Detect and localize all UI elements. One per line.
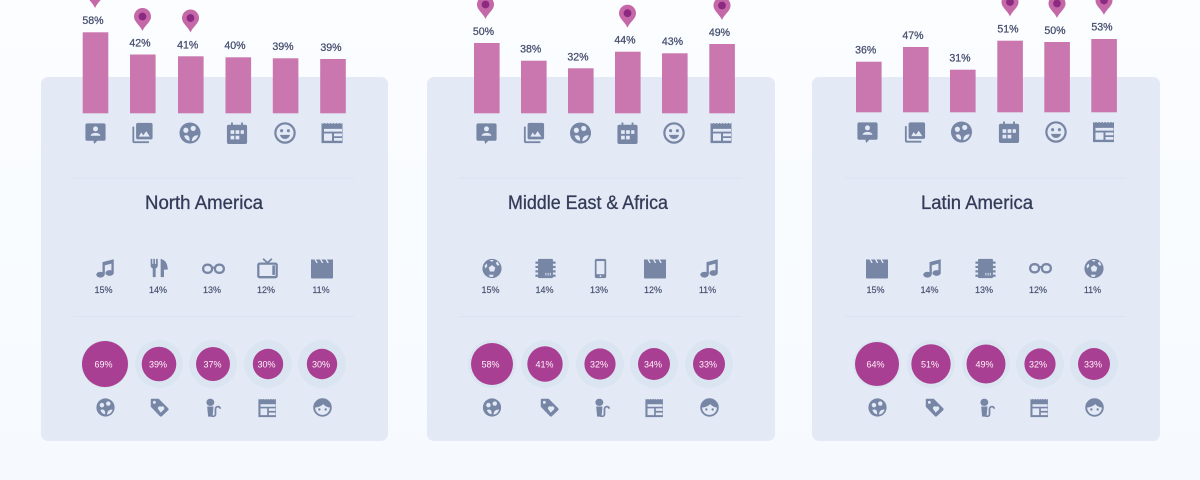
- bar chart: Middle East & Africa: 32%: [567, 51, 589, 63]
- circle chart: 58%: [481, 360, 500, 370]
- interest icons with percentages: 11%: [1084, 285, 1101, 295]
- panel: North America: [41, 0, 388, 441]
- bar chart: Middle East & Africa: 44%: [614, 35, 636, 47]
- bar chart: Latin America: 47%: [902, 30, 924, 42]
- interest icons with percentages: 14%: [920, 285, 939, 295]
- bar category icons: [85, 122, 343, 144]
- circle chart: 37%: [203, 360, 222, 370]
- circle chart: 30%: [257, 360, 276, 370]
- interest icons with percentages: 11%: [699, 285, 716, 295]
- circle chart: 69%: [94, 360, 113, 370]
- circle chart: 34%: [644, 360, 662, 370]
- bar chart: Middle East & Africa: 38%: [520, 43, 542, 55]
- bar chart: Latin America: 51%: [997, 23, 1019, 35]
- circle category icons: [868, 398, 1103, 417]
- circle chart: 39%: [149, 360, 167, 370]
- interest icons with percentages: 15%: [94, 285, 113, 295]
- panel background: Latin America: [812, 77, 1160, 441]
- interest icons with percentages: 12%: [257, 285, 275, 295]
- region title: Middle East & Africa: [508, 193, 668, 214]
- bar chart: Middle East & Africa: 43%: [662, 36, 684, 48]
- bar chart: Middle East & Africa: [473, 26, 735, 113]
- circle chart: 32%: [590, 360, 608, 370]
- circle chart: 49%: [975, 360, 994, 370]
- circle chart: 64%: [866, 360, 885, 370]
- interest icons with percentages: 11%: [312, 285, 330, 295]
- circle chart: 30%: [312, 360, 330, 370]
- bar chart: North America: [82, 15, 346, 113]
- circle chart: 33%: [699, 360, 717, 370]
- bar chart: North America: 41%: [177, 40, 199, 52]
- interest icons with percentages: [866, 259, 1104, 295]
- panel: Middle East & Africa: [427, 0, 775, 441]
- interest icons with percentages: 13%: [203, 285, 221, 295]
- interest icons with percentages: 14%: [535, 285, 554, 295]
- bar chart: North America: 58%: [82, 15, 104, 27]
- interest icons with percentages: 13%: [590, 285, 608, 295]
- interest icons with percentages: 14%: [149, 285, 167, 295]
- interest icons with percentages: 15%: [866, 285, 885, 295]
- circle category icons: [96, 398, 331, 417]
- bar chart: Middle East & Africa: 50%: [473, 26, 495, 38]
- interest icons with percentages: 12%: [644, 285, 662, 295]
- circle chart: 33%: [1084, 360, 1102, 370]
- circle chart: 51%: [921, 360, 939, 370]
- circle chart: [853, 340, 1118, 388]
- circle category icons: [483, 398, 718, 417]
- bar chart: North America: 39%: [272, 41, 294, 53]
- bar chart: Latin America: 36%: [855, 44, 877, 56]
- circle chart: 32%: [1029, 360, 1047, 370]
- bar chart: North America: 40%: [224, 40, 246, 52]
- map pin markers: [86, 0, 199, 32]
- interest icons with percentages: 13%: [975, 285, 993, 295]
- bar chart: Latin America: 53%: [1091, 21, 1113, 33]
- bar chart: Middle East & Africa: 49%: [709, 27, 731, 39]
- bar chart: Latin America: [855, 21, 1117, 112]
- panel background: Middle East & Africa: [427, 77, 775, 441]
- map pin markers: [1002, 0, 1112, 18]
- bar category icons: [476, 122, 732, 144]
- interest icons with percentages: 15%: [481, 285, 500, 295]
- bar category icons: [857, 121, 1114, 143]
- bar chart: North America: 42%: [129, 38, 151, 50]
- circle chart: [468, 340, 733, 388]
- interest icons with percentages: [94, 259, 333, 295]
- panel background: North America: [41, 77, 388, 441]
- bar chart: Latin America: 50%: [1044, 25, 1066, 37]
- circle chart: 41%: [535, 360, 554, 370]
- interest icons with percentages: 12%: [1029, 285, 1047, 295]
- circle chart: [81, 340, 346, 388]
- region title: North America: [145, 193, 263, 214]
- map pin markers: [477, 0, 730, 28]
- interest icons with percentages: [481, 259, 718, 295]
- region title: Latin America: [921, 193, 1033, 214]
- panel: Latin America: [812, 0, 1160, 441]
- bar chart: North America: 39%: [320, 42, 342, 54]
- bar chart: Latin America: 31%: [949, 53, 971, 65]
